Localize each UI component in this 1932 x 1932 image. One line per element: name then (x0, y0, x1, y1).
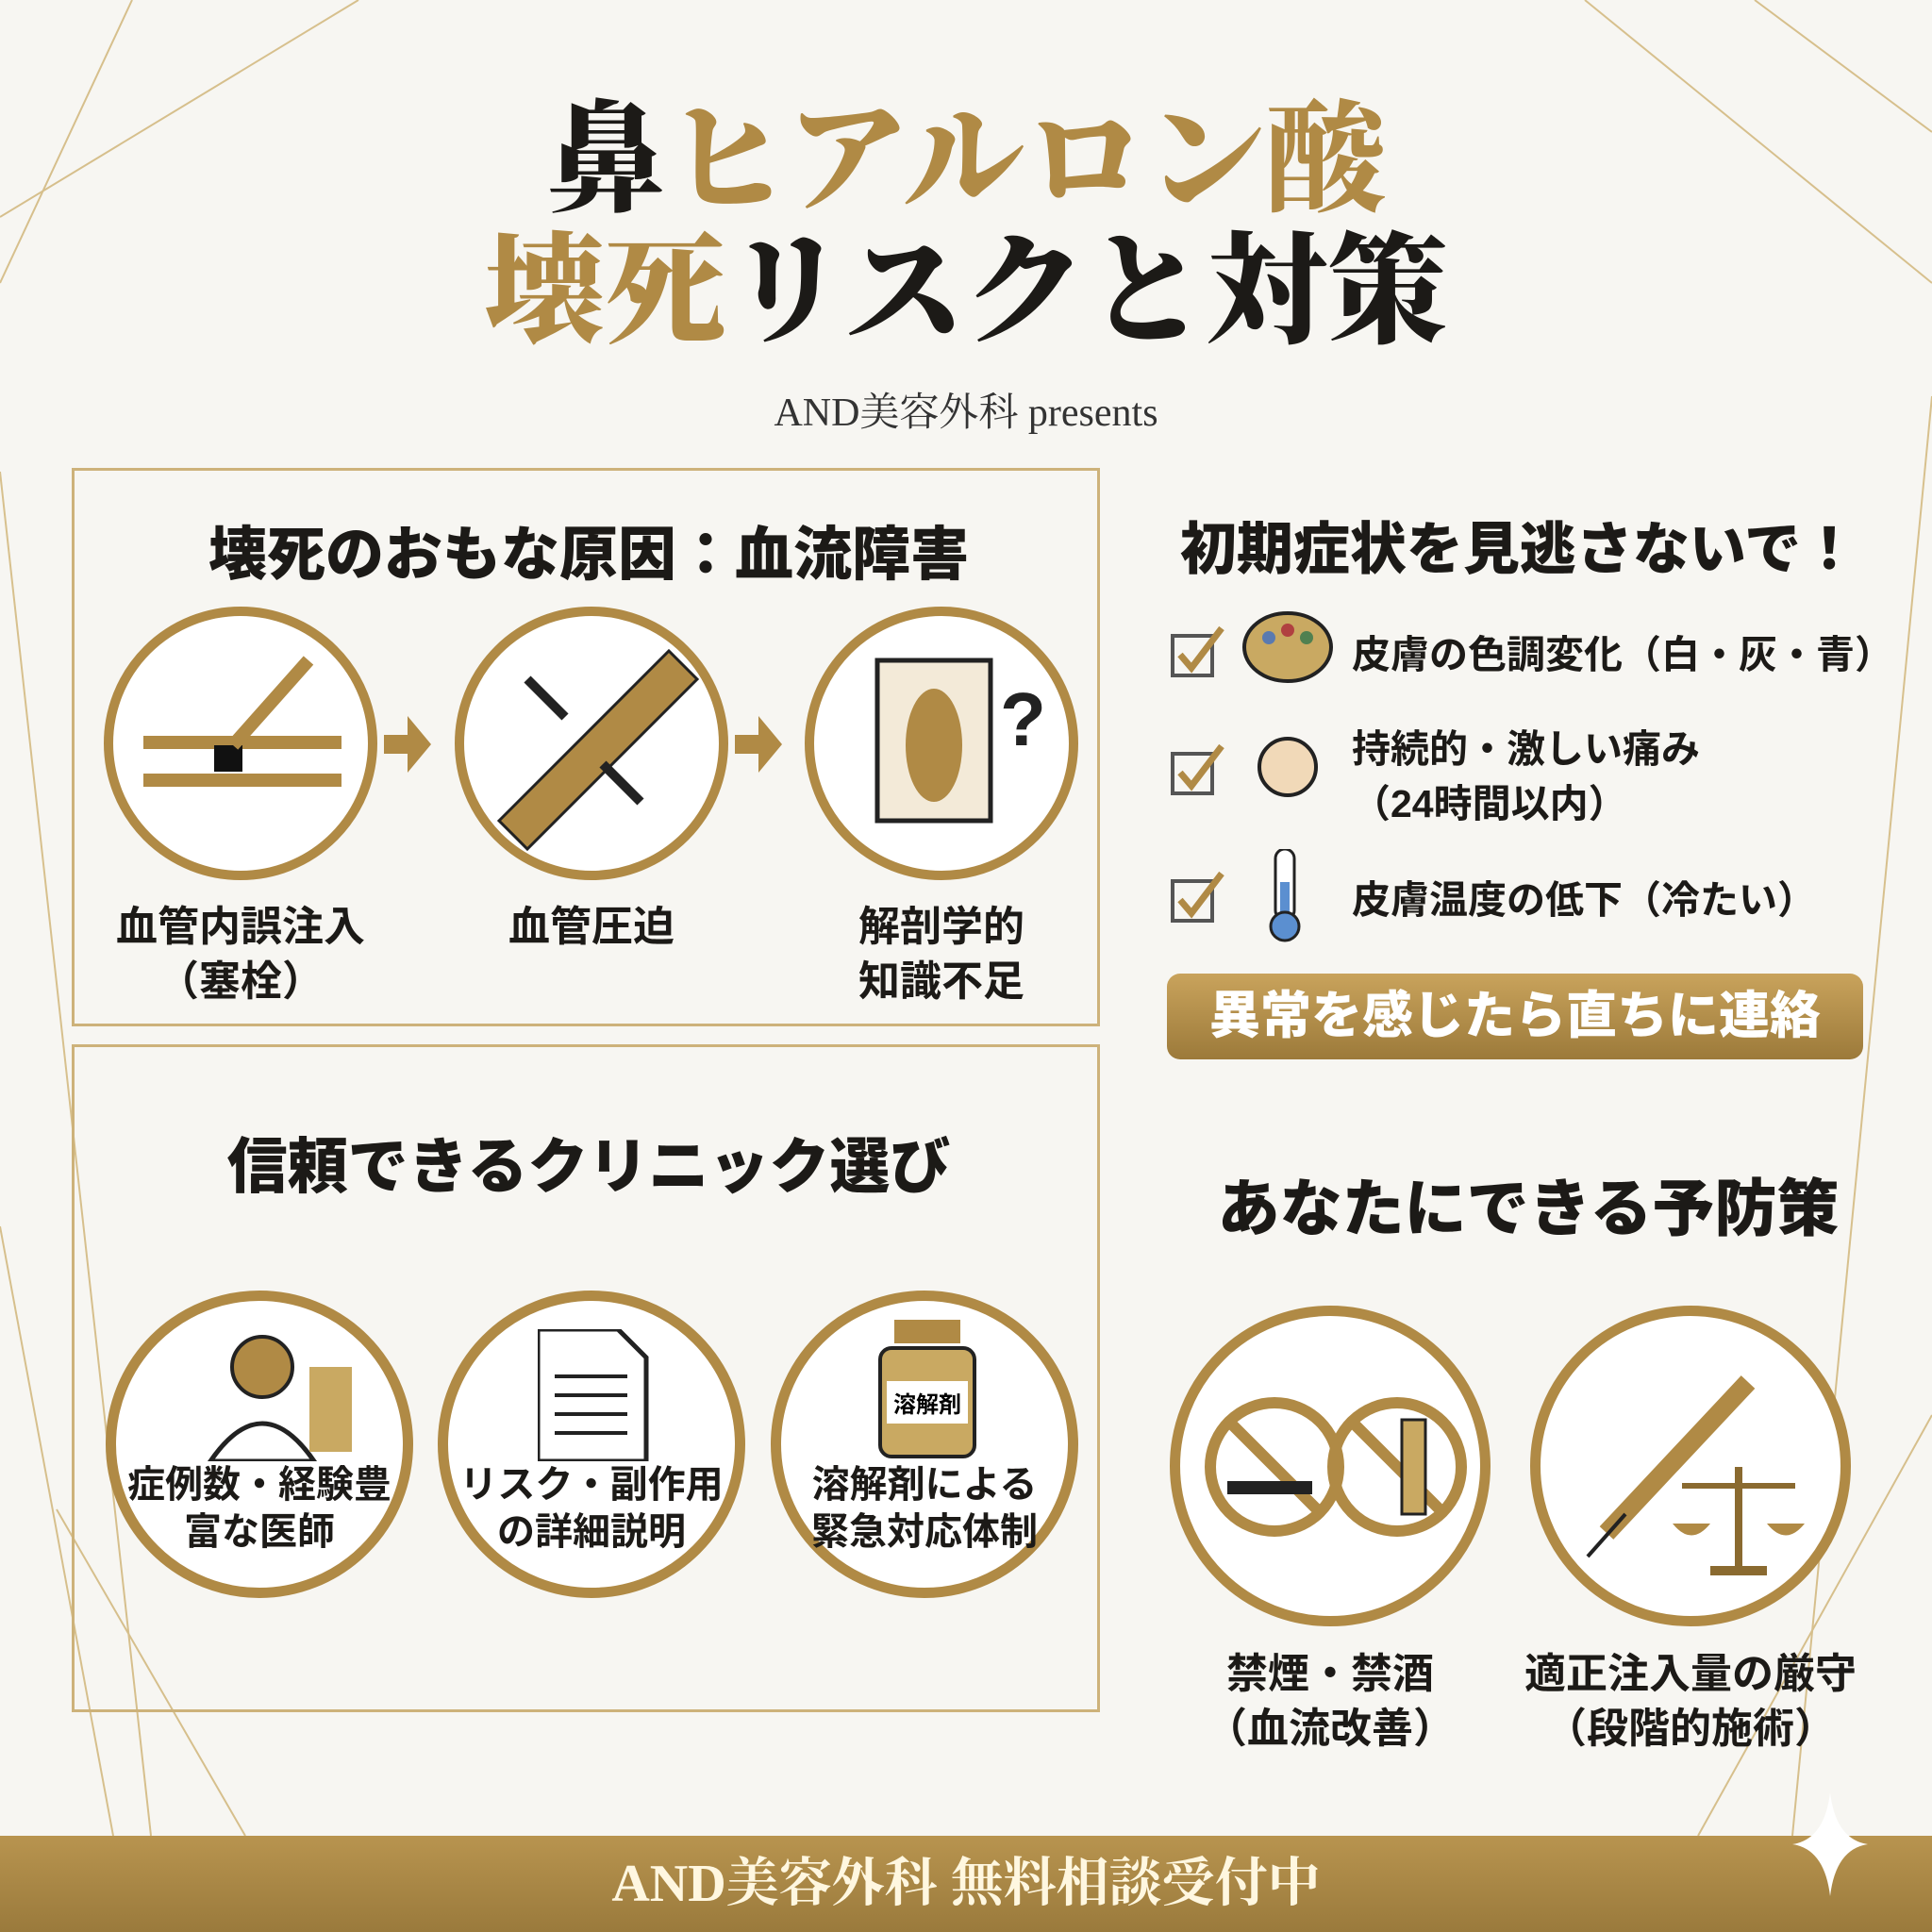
arrow (735, 716, 782, 773)
title: 鼻ヒアルロン酸 (546, 93, 1386, 227)
label (116, 904, 365, 1005)
label: no smoking: （血流改善） (1206, 1706, 1455, 1752)
icon: anatomy: ? (1000, 677, 1046, 761)
circle: doctor: 症例数・経験豊 (127, 1464, 391, 1506)
footer: AND美容外科 無料相談受付中 (611, 1855, 1321, 1913)
circle: explanation: の詳細説明 (497, 1511, 686, 1553)
icon: injection (104, 607, 377, 880)
circle: dissolver: 溶解剤による (812, 1464, 1037, 1506)
symptom: pain (1171, 727, 1700, 825)
title (484, 93, 1448, 359)
heading: causes: 壊死のおもな原因：血流障害 (208, 523, 969, 588)
circle: doctor: 富な医師 (184, 1511, 335, 1553)
symptom: pain: 持続的・激しい痛み (1352, 727, 1700, 771)
circle: dissolver: 緊急対応体制 (811, 1511, 1038, 1553)
label: no smoking (1206, 1651, 1455, 1752)
callout button (1167, 974, 1863, 1059)
label: dose: （段階的施術） (1545, 1706, 1836, 1752)
symptom: color: 皮膚の色調変化（白・灰・青） (1352, 633, 1893, 676)
symptom list (1171, 611, 1893, 941)
heading: clinic: 信頼できるクリニック選び (227, 1133, 950, 1201)
callout button: 異常を感じたら直ちに連絡 (1209, 988, 1821, 1044)
label: 知識不足 (858, 958, 1024, 1005)
label: no smoking: 禁煙・禁酒 (1226, 1651, 1434, 1697)
label: （塞栓） (158, 958, 324, 1005)
symptom: pain: （24時間以内） (1352, 782, 1627, 825)
title: 壊死リスクと対策 (484, 225, 1448, 359)
symptom: temperature (1171, 849, 1816, 941)
circle: doctor (106, 1291, 413, 1598)
circle: dissolver: 溶解剤 (893, 1392, 961, 1418)
circle: dissolver (771, 1291, 1078, 1598)
icon: anatomy (805, 607, 1078, 880)
circle: explanation: リスク・副作用 (459, 1464, 724, 1506)
heading: symptoms: 初期症状を見逃さないで！ (1180, 518, 1857, 581)
icon: sparkle (1792, 1794, 1868, 1896)
heading: prevention: あなたにできる予防策 (1218, 1174, 1839, 1243)
circle: no smoking (1170, 1306, 1491, 1626)
icon: compression (455, 607, 728, 880)
label: dose (1524, 1651, 1857, 1752)
label (858, 904, 1024, 1005)
label: 解剖学的 (858, 904, 1024, 950)
subtitle: AND美容外科 presents (774, 391, 1158, 435)
panel: clinic (72, 1044, 1100, 1712)
circle: dose (1530, 1306, 1851, 1626)
symptom: temperature: 皮膚温度の低下（冷たい） (1352, 878, 1816, 922)
footer (0, 1836, 1932, 1932)
arrow (384, 716, 431, 773)
panel: causes (72, 468, 1100, 1026)
label: 血管内誤注入 (116, 904, 365, 950)
symptom: color (1171, 611, 1893, 683)
label: dose: 適正注入量の厳守 (1524, 1651, 1857, 1697)
circle: explanation (438, 1291, 745, 1598)
label: 血管圧迫 (508, 904, 675, 950)
